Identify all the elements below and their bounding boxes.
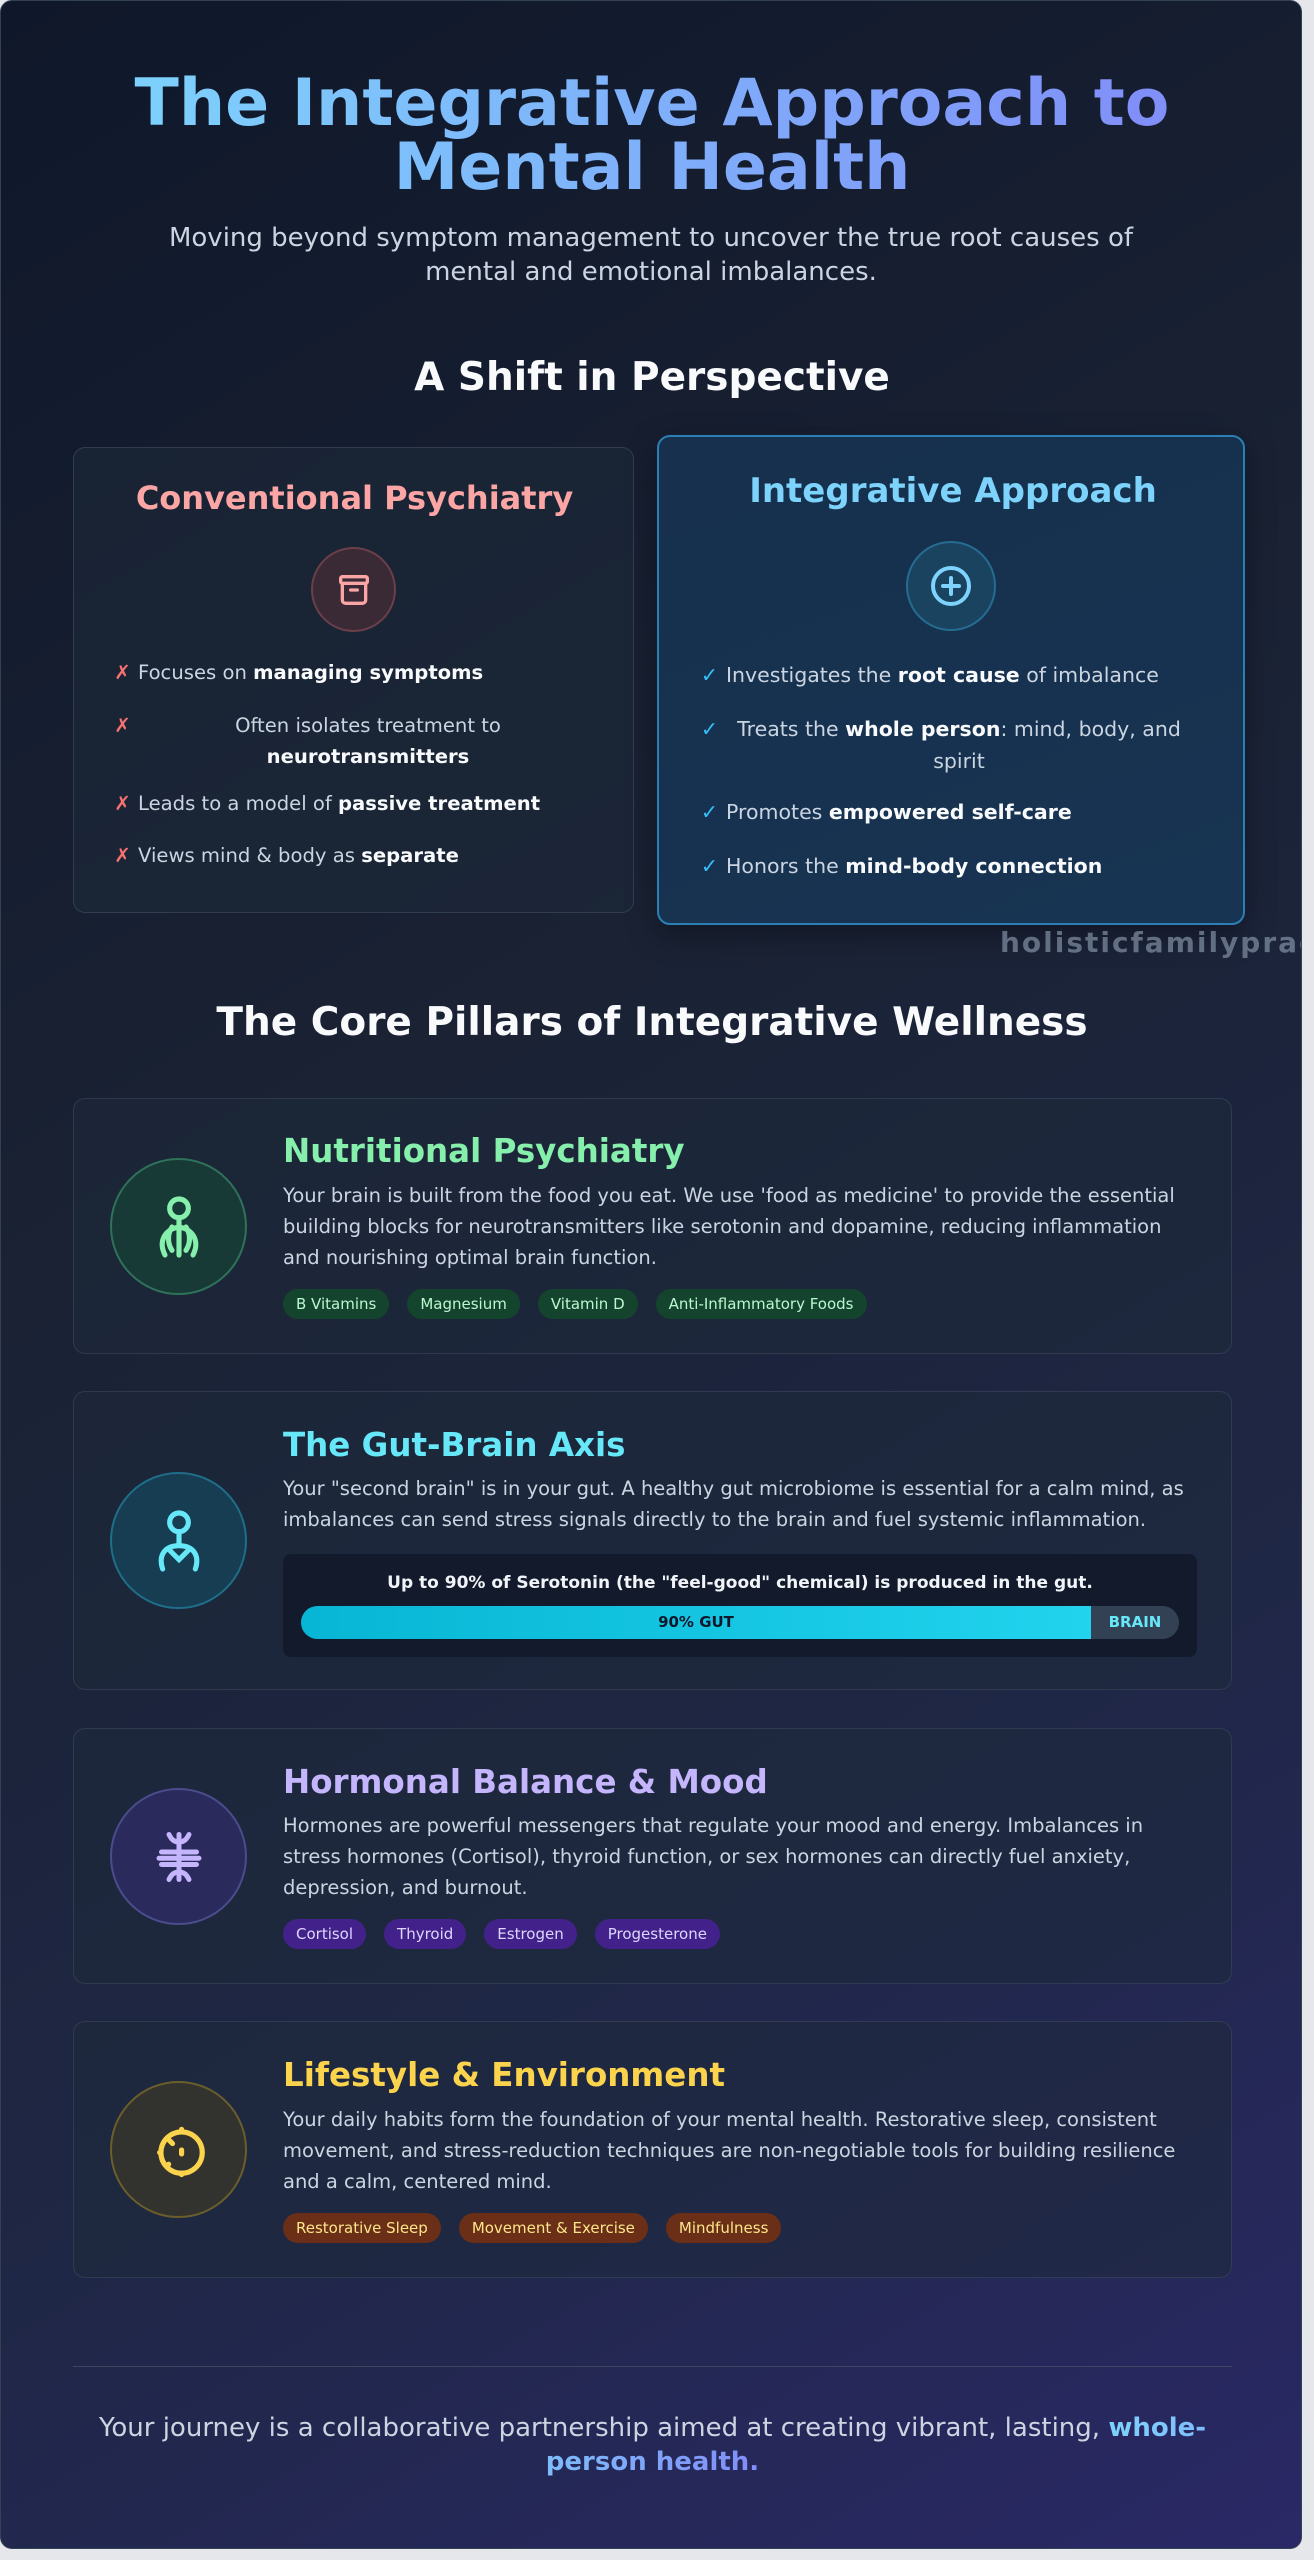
panel title: Integrative Approach	[749, 471, 1157, 511]
panel: integrative approach	[657, 435, 1245, 925]
tags: Magnesium	[420, 1295, 507, 1313]
text: ✓	[701, 854, 718, 878]
bar chart: 90% gut vs brain	[301, 1606, 1179, 1639]
title: Nutritional Psychiatry	[283, 1132, 685, 1170]
text: Investigates the root cause of imbalance	[726, 663, 1159, 687]
pillar: hormonal balance	[73, 1728, 1232, 1984]
text: ✓	[701, 717, 718, 741]
tags: Vitamin D	[551, 1295, 625, 1313]
panel title: Conventional Psychiatry	[136, 479, 573, 517]
icon: nutrition	[110, 1158, 247, 1295]
stat box: serotonin	[283, 1554, 1197, 1657]
text: ✗	[114, 714, 131, 737]
icon: hormones	[110, 1788, 247, 1925]
text: Views mind & body as separate	[138, 844, 459, 867]
panel: conventional psychiatry	[73, 447, 634, 913]
title: The Gut-Brain Axis	[283, 1426, 625, 1464]
tags: Mindfulness	[679, 2219, 768, 2237]
text: Leads to a model of passive treatment	[138, 792, 540, 815]
text: Focuses on managing symptoms	[138, 661, 483, 684]
description: Your brain is built from the food you eat. We use 'food as medicine' to provide the essential building blocks for neurotransmitters like serotonin and dopamine, reducing inflammation and nourishing optimal brain function.	[283, 1184, 1175, 1269]
text: ✗	[114, 661, 131, 684]
text: ✓	[701, 663, 718, 687]
text: ✗	[114, 792, 131, 815]
text: ✓	[701, 800, 718, 824]
text: Often isolates treatment to neurotransmitters	[235, 714, 501, 768]
text: Promotes empowered self-care	[726, 800, 1072, 824]
description: Hormones are powerful messengers that regulate your mood and energy. Imbalances in stress hormones (Cortisol), thyroid function, or sex hormones can directly fuel anxiety, depression, and burnout.	[283, 1814, 1143, 1899]
icon: archive box	[311, 547, 396, 632]
list: integrative	[701, 663, 1181, 878]
title: The Integrative Approach to	[135, 66, 1169, 141]
bar chart: 90% gut vs brain: 90% GUT	[658, 1613, 734, 1631]
text: ✗	[114, 844, 131, 867]
tags: Estrogen	[497, 1925, 564, 1943]
title: Hormonal Balance & Mood	[283, 1763, 768, 1801]
bar chart: 90% gut vs brain: BRAIN	[1109, 1613, 1161, 1631]
pillar: lifestyle	[73, 2021, 1232, 2278]
text: Honors the mind-body connection	[726, 854, 1102, 878]
subtitle: Moving beyond symptom management to uncover the true root causes of mental and emotional imbalances.	[169, 223, 1133, 287]
stat text: Up to 90% of Serotonin (the "feel-good" chemical) is produced in the gut.	[387, 1573, 1093, 1593]
icon: clock	[110, 2081, 247, 2218]
tags	[283, 1919, 720, 1949]
tags: Movement & Exercise	[472, 2219, 635, 2237]
title: Mental Health	[394, 130, 910, 205]
footer text: Your journey is a collaborative partnership aimed at creating vibrant, lasting, whole-person health.	[99, 2413, 1206, 2477]
tags: B Vitamins	[296, 1295, 376, 1313]
tags: Progesterone	[608, 1925, 707, 1943]
pillar: gut-brain axis	[73, 1391, 1232, 1690]
title: Lifestyle & Environment	[283, 2056, 725, 2094]
tags	[283, 2213, 781, 2243]
text: Treats the whole person: mind, body, and spirit	[737, 717, 1181, 773]
tags: Restorative Sleep	[296, 2219, 428, 2237]
tags: Thyroid	[397, 1925, 453, 1943]
icon: gut	[110, 1472, 247, 1609]
tags	[283, 1289, 867, 1319]
tags: Cortisol	[296, 1925, 353, 1943]
heading: shift in perspective: A Shift in Perspective	[414, 355, 890, 400]
heading: core pillars: The Core Pillars of Integrative Wellness	[216, 1000, 1088, 1045]
title	[101, 72, 1203, 200]
list: conventional	[114, 661, 540, 867]
description: Your "second brain" is in your gut. A healthy gut microbiome is essential for a calm mind, as imbalances can send stress signals directly to the brain and fuel systemic inflammation.	[283, 1477, 1184, 1531]
icon: plus circle	[906, 541, 996, 631]
pillar: nutritional psychiatry	[73, 1098, 1232, 1354]
tags: Anti-Inflammatory Foods	[669, 1295, 854, 1313]
description: Your daily habits form the foundation of your mental health. Restorative sleep, consistent movement, and stress-reduction techniques are non-negotiable tools for building resilience and a calm, centered mind.	[283, 2108, 1175, 2193]
